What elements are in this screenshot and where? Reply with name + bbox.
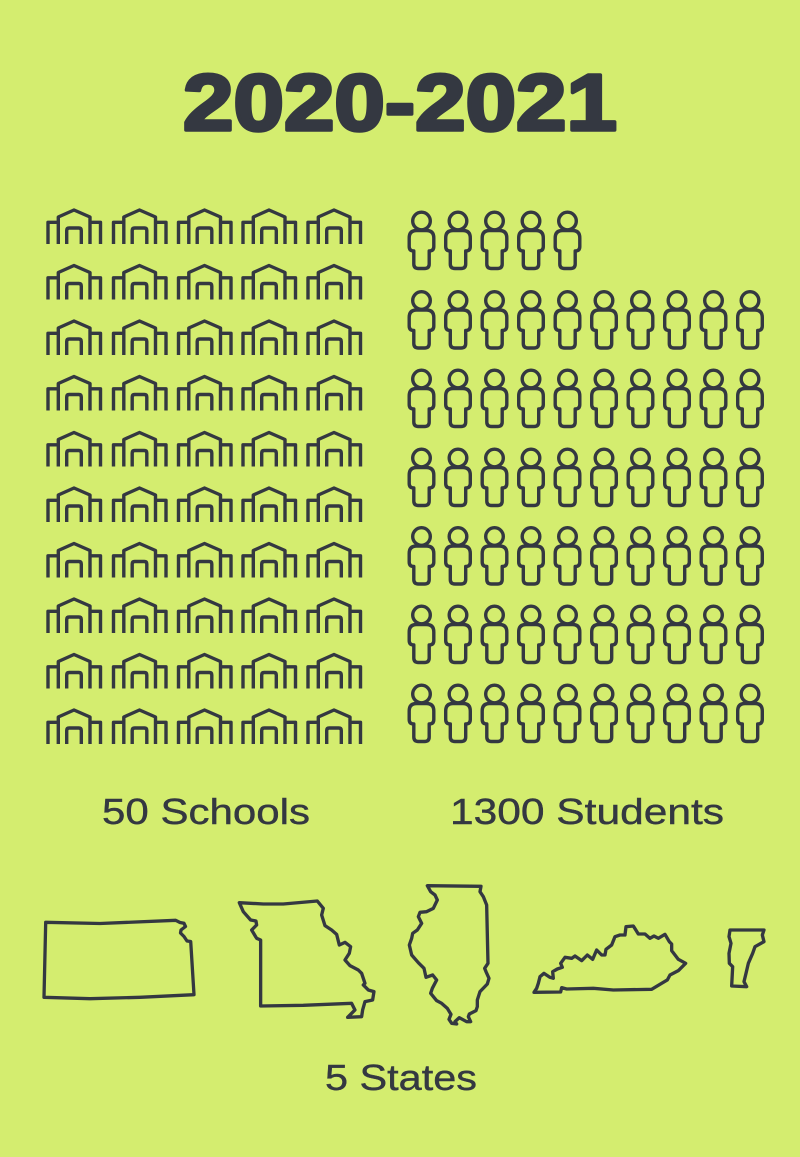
icon grid: 1300 students [409, 212, 762, 741]
state: Kansas [44, 920, 194, 999]
title: 2020-2021 [183, 58, 617, 147]
state outlines [44, 886, 764, 1024]
state: Illinois [409, 886, 489, 1024]
label: 50 schools: 50 Schools [102, 791, 310, 832]
label: 1300 students: 1300 Students [450, 791, 724, 832]
state: Missouri [239, 901, 374, 1017]
state: Vermont [729, 930, 764, 987]
label: 5 states: 5 States [325, 1057, 477, 1098]
state: Kentucky [534, 926, 686, 992]
icon grid: 50 schools [48, 210, 360, 744]
